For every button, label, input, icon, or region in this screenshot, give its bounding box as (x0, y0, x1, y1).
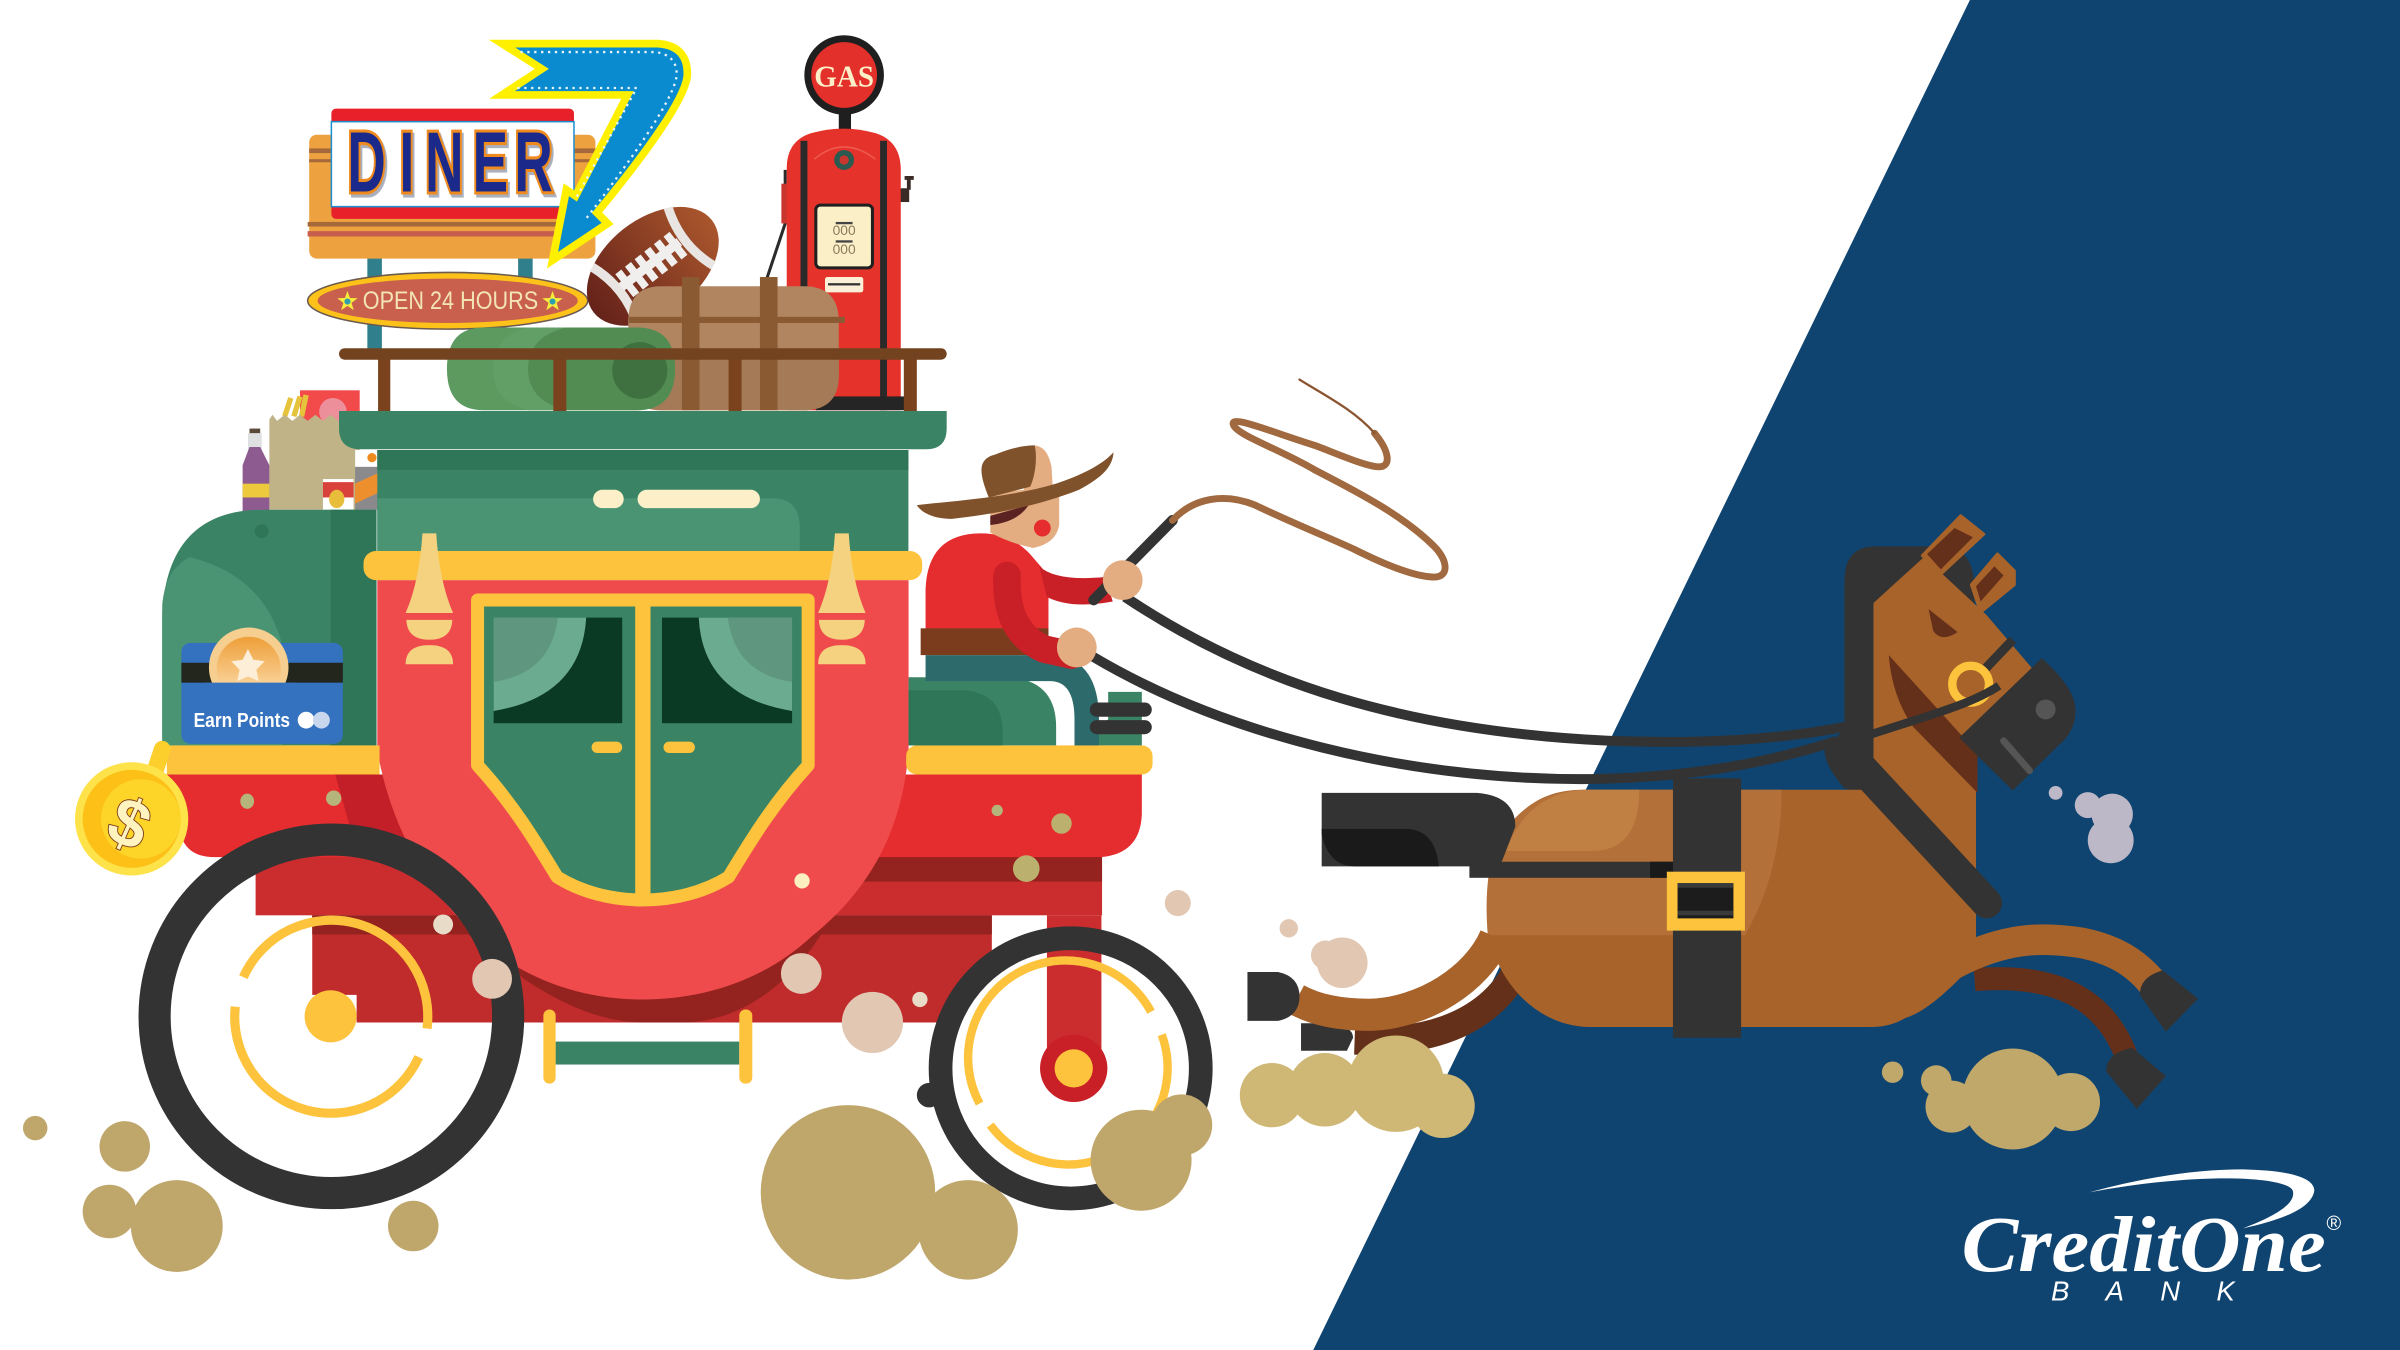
collar joint (1824, 729, 1873, 788)
mouth (2004, 741, 2030, 771)
near foreleg left (1296, 937, 1495, 1015)
luggage (628, 277, 845, 410)
icon: football (564, 183, 741, 350)
footbox (1074, 692, 1142, 745)
DINER lettering: DINER (347, 114, 553, 211)
collar strap (1857, 762, 1987, 903)
coach body bowl (377, 580, 909, 999)
muzzle (1959, 658, 2076, 791)
lower arm (1007, 576, 1071, 655)
earn points card (181, 628, 343, 744)
orange sign backing (308, 135, 595, 259)
jaw shadow (1889, 655, 1978, 793)
left luggage compartment (162, 510, 377, 745)
lower hand (1057, 628, 1097, 667)
cab upper (377, 450, 908, 557)
nostril (2036, 699, 2056, 719)
left window (494, 618, 622, 723)
icon: groceries behind coach (243, 390, 378, 514)
bridle ring (1952, 666, 1989, 703)
mane (1844, 546, 1974, 796)
pump gauge: 000 (833, 223, 856, 238)
hose (767, 170, 785, 279)
pants (926, 655, 1099, 745)
soup can (323, 479, 354, 510)
eye (1929, 609, 1958, 637)
right lamp ornament (818, 533, 866, 664)
reins (1093, 597, 1852, 779)
front wheel (917, 938, 1201, 1198)
hat brim (917, 452, 1114, 519)
belt (921, 628, 1048, 655)
pump globe: GAS (814, 59, 874, 93)
logo wordmark: CreditOne (1961, 1201, 2326, 1289)
cowboy hands and footrest (1057, 560, 1152, 734)
logo swoosh (2089, 1169, 2314, 1228)
open 24 hours oval (308, 272, 588, 329)
yellow roof trim (364, 551, 922, 580)
yellow deck trim left (167, 745, 380, 774)
red coach side band (167, 774, 1142, 857)
cheek (1034, 520, 1051, 536)
harness seat (1322, 793, 1515, 866)
pump globe (804, 35, 884, 115)
saddle highlight (1506, 790, 1639, 851)
upper hand (1103, 560, 1143, 600)
head (990, 487, 1059, 548)
coach undercarriage (256, 849, 1102, 1068)
body (1487, 790, 1976, 1027)
roof rail (339, 348, 947, 412)
sign posts (367, 257, 533, 352)
Credit One Bank logo (1961, 1169, 2342, 1306)
diner sign (308, 44, 687, 352)
rein to bit (1852, 686, 1999, 741)
pump slot (825, 277, 863, 292)
hat crown (981, 445, 1053, 497)
footrest straps (1090, 703, 1152, 734)
driver seat (909, 677, 1056, 745)
red book (300, 390, 360, 436)
hoof far right (2106, 1048, 2166, 1109)
sign board (331, 109, 574, 219)
reward coin (205, 628, 297, 710)
logo subline: BANK (2051, 1275, 2236, 1306)
dust: hoof cloud (1240, 1035, 1475, 1138)
icon: gold dollar coin: $ (97, 782, 162, 866)
dust: front wheel (761, 1094, 1212, 1280)
whip handle (1094, 520, 1172, 600)
harness shaft (1469, 862, 1673, 878)
door handle (664, 742, 695, 753)
raised arm (1039, 566, 1113, 604)
near leg right (1953, 940, 2161, 995)
pump gauge: 000 (833, 242, 856, 257)
pump body (787, 129, 905, 410)
roof lip (339, 411, 947, 449)
carriage door (478, 594, 808, 905)
buckle (1667, 872, 1745, 931)
roof window pill (593, 490, 624, 508)
icon: gold dollar coin (75, 739, 188, 876)
ear near (1922, 516, 1984, 573)
star (337, 291, 358, 310)
hoof near right (2140, 970, 2198, 1032)
pump gauge (816, 205, 872, 268)
cereal box (355, 450, 378, 510)
right window (662, 618, 792, 723)
pencils (285, 395, 306, 416)
dust: right hoof cloud (1882, 1048, 2100, 1149)
dust: pale puffs (433, 890, 1368, 1053)
roof window bar (638, 490, 760, 508)
blue neon arrow (502, 44, 687, 260)
purple bottle (243, 429, 269, 514)
whip cord (1172, 380, 1445, 577)
horse (1247, 516, 2198, 1109)
ear far (1971, 554, 2014, 612)
gas pump (767, 35, 914, 410)
body highlight (1487, 790, 1782, 935)
belly strap (1673, 778, 1741, 1038)
pump neck (839, 113, 851, 132)
yellow deck trim right (906, 745, 1153, 774)
oval label: OPEN 24 HOURS (363, 287, 538, 315)
hair (990, 505, 1029, 525)
far legs (1355, 967, 2128, 1059)
registered mark: ® (2327, 1213, 2342, 1235)
navy diagonal background panel (1313, 0, 2400, 1350)
hoof near left (1247, 972, 1299, 1021)
torso (926, 533, 1048, 631)
coach step (543, 1009, 752, 1084)
dust: rear wheel (23, 1116, 439, 1272)
pump lever (900, 176, 914, 202)
door handle (592, 742, 622, 753)
bedroll (447, 328, 675, 410)
bridle strap (1984, 640, 2013, 670)
card text: Earn Points (194, 710, 290, 732)
left lamp ornament (406, 533, 453, 664)
rivets (240, 791, 1072, 889)
breath puff (2049, 786, 2134, 863)
neck and head (1873, 556, 2033, 918)
cowboy driver (917, 380, 1445, 745)
grocery bag (269, 415, 360, 510)
rear wheel (155, 840, 508, 1193)
nozzle (781, 184, 788, 223)
hoof far left (1301, 1023, 1353, 1051)
star (542, 291, 563, 310)
